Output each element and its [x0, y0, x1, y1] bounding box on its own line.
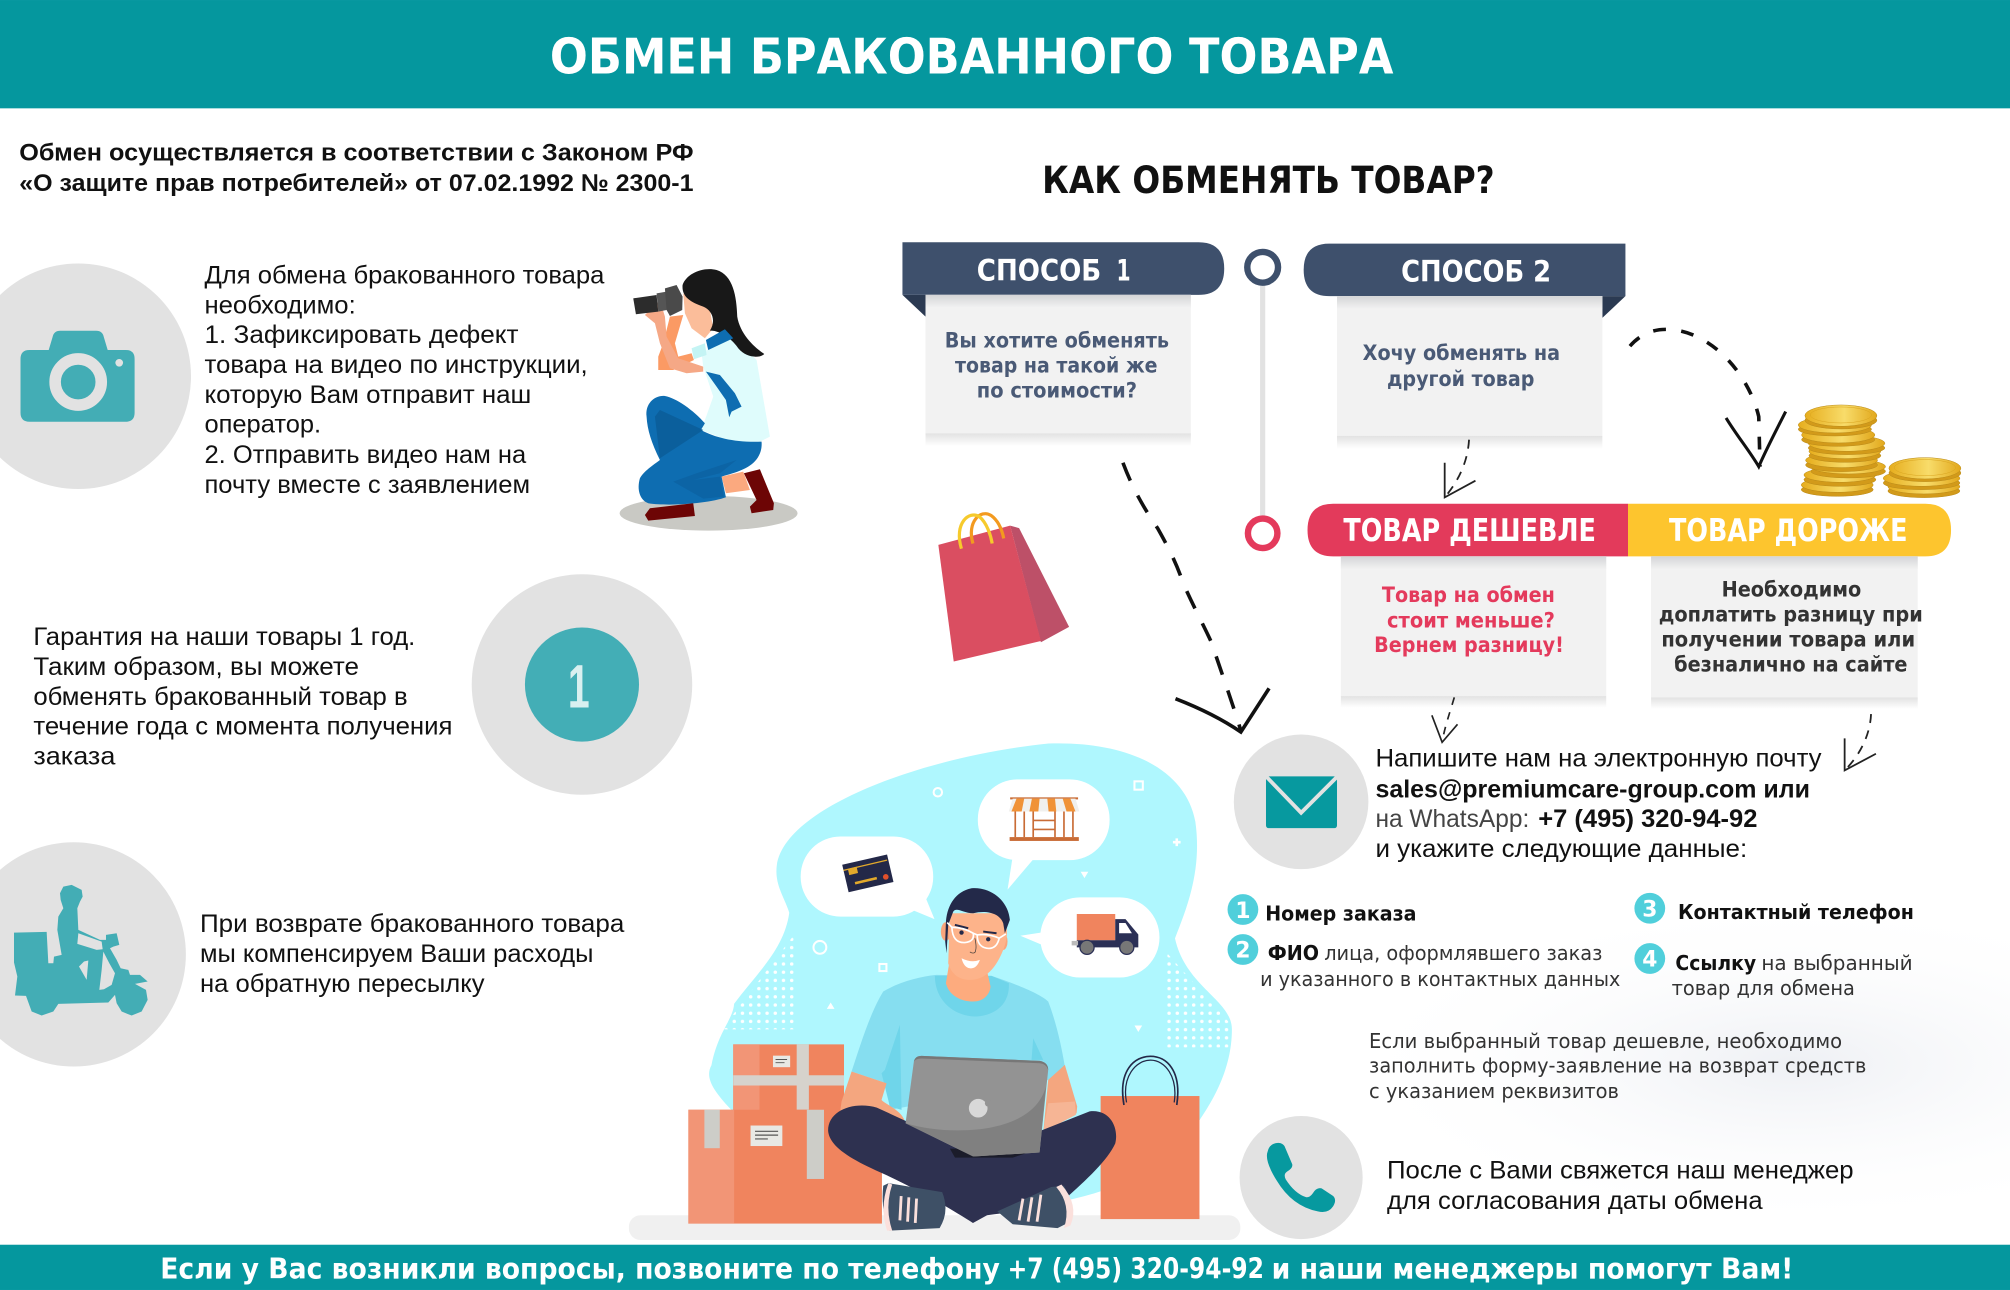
footer text: Если у Вас возникли вопросы, позвоните по телефону	[160, 1253, 1000, 1286]
text: write to email or WhatsApp: и укажите следующие данные:	[1375, 835, 1747, 863]
text: one year guarantee: обменять бракованный товар в	[33, 683, 408, 711]
text: return shipping compensation: мы компенсируем Ваши расходы	[200, 940, 594, 968]
text: how to record the defect: почту вместе с заявлением	[204, 471, 530, 499]
footer text: и наши менеджеры помогут Вам!	[1272, 1253, 1793, 1286]
panel: method 2: СПОСОБ 2	[1401, 254, 1551, 288]
illustration: man with laptop	[629, 743, 1240, 1240]
speech bubble: truck	[1020, 897, 1159, 977]
arrow: small dashed to cheaper	[1445, 440, 1475, 497]
panel: cheaper item: Товар на обмен	[1382, 582, 1555, 607]
text: return shipping compensation: При возврате бракованного товара	[200, 910, 624, 938]
man figure	[828, 888, 1116, 1231]
text: manager will contact: для согласования даты обмена	[1387, 1187, 1763, 1215]
text: write to email or WhatsApp: Напишите нам на электронную почту	[1375, 745, 1822, 773]
text: return shipping compensation: на обратную пересылку	[200, 970, 485, 998]
text: one year guarantee: заказа	[33, 743, 115, 771]
panel: more expensive item: доплатить разницу при	[1659, 602, 1923, 627]
list: required data: и указанного в контактных данных	[1260, 967, 1620, 991]
panel: method 1: по стоимости?	[977, 377, 1137, 402]
icon: gold coins	[1798, 405, 1961, 498]
text: return shipping compensation	[200, 910, 624, 998]
text: how to record the defect: которую Вам отправит наш	[204, 381, 531, 409]
panel: method 1: товар на такой же	[955, 352, 1158, 377]
title: ОБМЕН БРАКОВАННОГО ТОВАРА	[550, 30, 1394, 86]
banner: cheaper / more expensive: ТОВАР ДОРОЖЕ	[1669, 513, 1907, 549]
list: required data: Номер заказа	[1265, 901, 1416, 925]
text: one year guarantee: Таким образом, вы можете	[33, 653, 359, 681]
text: one year guarantee: Гарантия на наши товары 1 год.	[33, 623, 415, 651]
law note: «О защите прав потребителей» от 07.02.1992 № 2300-1	[19, 170, 694, 197]
speech bubble: store	[978, 779, 1110, 890]
arrow: small dashed from cheaper panel	[1432, 697, 1458, 742]
text: cheaper item refund note: заполнить форму-заявление на возврат средств	[1369, 1053, 1866, 1077]
panel: method 1	[902, 242, 1224, 446]
text: how to record the defect: Для обмена бракованного товара	[204, 261, 605, 289]
list: required data: товар для обмена	[1672, 976, 1855, 1000]
text: how to record the defect	[204, 261, 605, 499]
banner: cheaper / more expensive: ТОВАР ДЕШЕВЛЕ	[1343, 513, 1596, 549]
panel: method 1: 1	[1117, 254, 1131, 288]
speech bubble: card	[801, 836, 934, 919]
panel: more expensive item	[1651, 556, 1923, 709]
list: required data: 1	[1235, 899, 1250, 924]
panel: method 2	[1304, 244, 1625, 449]
arrow: small dashed from expensive panel	[1845, 714, 1876, 770]
law note	[19, 139, 694, 197]
illustration: woman with camera	[620, 269, 798, 531]
banner: cheaper / more expensive	[1308, 504, 1951, 556]
list: required data: 4	[1642, 948, 1657, 973]
text: how to record the defect: 1. Зафиксировать дефект	[204, 321, 519, 349]
text: how to record the defect: необходимо:	[204, 291, 356, 319]
text: write to email or WhatsApp	[1375, 745, 1822, 863]
text: cheaper item refund note: Если выбранный товар дешевле, необходимо	[1369, 1029, 1842, 1053]
text: write to email or WhatsApp: на WhatsApp:	[1375, 805, 1529, 833]
list: required data: ФИО	[1268, 941, 1319, 965]
header band	[0, 0, 2010, 108]
icon: number one in grey circle	[472, 574, 692, 795]
icon: number one in grey circle: 1	[568, 653, 590, 722]
arrow: method 1 to email	[1123, 463, 1269, 732]
text: write to email or WhatsApp: +7 (495) 320-94-92	[1538, 805, 1757, 833]
list: required data: на выбранный	[1761, 951, 1913, 975]
shopping bag	[1101, 1056, 1199, 1219]
footer text	[160, 1253, 1793, 1286]
panel: method 1: СПОСОБ	[977, 254, 1101, 288]
arrow: method 2 to coins	[1630, 329, 1786, 467]
icon: courier on a scooter in grey circle	[0, 842, 186, 1067]
panel: more expensive item: Необходимо	[1722, 577, 1861, 602]
icon: envelope in grey circle	[1234, 735, 1368, 869]
text: one year guarantee	[33, 623, 453, 771]
panel: method 1: Вы хотите обменять	[945, 327, 1169, 352]
list: required data: лица, оформлявшего заказ	[1324, 941, 1602, 965]
footer band	[0, 1245, 2010, 1290]
list: required data: Ссылку	[1675, 951, 1756, 975]
footer text: +7 (495) 320-94-92	[1008, 1253, 1264, 1286]
text: how to record the defect: оператор.	[204, 411, 321, 439]
panel: method 2: Хочу обменять на	[1363, 340, 1560, 365]
text: how to record the defect: товара на видео по инструкции,	[204, 351, 588, 379]
text: cheaper item refund note	[1369, 1029, 1866, 1103]
text: manager will contact	[1387, 1157, 1854, 1215]
list: required data: 2	[1235, 939, 1250, 964]
icon: camera in grey circle	[0, 263, 191, 489]
timeline connector	[1247, 252, 1278, 548]
panel: more expensive item: получении товара или	[1661, 627, 1915, 652]
law note: Обмен осуществляется в соответствии с Законом РФ	[19, 139, 694, 166]
text: write to email or WhatsApp: sales@premiumcare-group.com или	[1375, 775, 1810, 803]
text: manager will contact: После с Вами свяжется наш менеджер	[1387, 1157, 1854, 1185]
text: cheaper item refund note: с указанием реквизитов	[1369, 1079, 1619, 1103]
icon: phone in grey circle	[1240, 1116, 1363, 1239]
list: required data	[1228, 893, 1914, 1000]
text: how to record the defect: 2. Отправить видео нам на	[204, 441, 526, 469]
list: required data: 3	[1642, 898, 1657, 923]
heading: how to exchange: КАК ОБМЕНЯТЬ ТОВАР?	[1042, 158, 1495, 202]
list: required data: Контактный телефон	[1678, 900, 1914, 924]
icon: shopping bag	[938, 514, 1069, 661]
panel: method 2: другой товар	[1387, 366, 1534, 391]
panel: cheaper item: стоит меньше?	[1387, 608, 1555, 633]
text: one year guarantee: течение года с момента получения	[33, 713, 453, 741]
panel: more expensive item: безналично на сайте	[1674, 652, 1907, 677]
panel: cheaper item	[1341, 556, 1606, 708]
boxes	[688, 1044, 882, 1224]
panel: cheaper item: Вернем разницу!	[1374, 632, 1564, 657]
